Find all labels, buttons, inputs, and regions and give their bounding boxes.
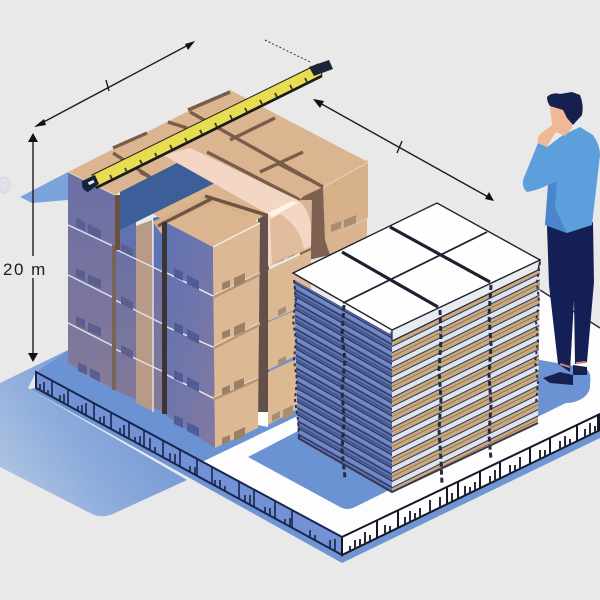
column B faces xyxy=(115,245,163,412)
hand at chin xyxy=(538,125,556,147)
column B tape strip xyxy=(136,220,153,411)
tape blade xyxy=(92,64,322,187)
platform white floor xyxy=(202,290,600,537)
floor edge line xyxy=(540,290,600,328)
column B white edge xyxy=(152,220,154,412)
column D bottom box xyxy=(268,352,311,425)
brown straps between columns xyxy=(158,196,266,226)
paper white rim xyxy=(392,260,540,341)
paper right face xyxy=(392,262,540,492)
tape measure xyxy=(82,60,333,192)
cast shadow band left of boxes xyxy=(20,172,68,203)
column D second box xyxy=(268,250,311,321)
column C highlights xyxy=(167,223,260,398)
left shoe xyxy=(543,372,573,385)
column A boxes xyxy=(68,172,115,390)
ankle skin xyxy=(560,362,586,367)
brown strap on right box xyxy=(300,186,330,262)
platform xyxy=(30,290,600,563)
tape tick marks xyxy=(110,78,307,179)
platform underside shadow xyxy=(30,388,600,563)
pale tape band across top xyxy=(163,148,311,266)
height arrow xyxy=(28,133,38,362)
paper bottom edge xyxy=(298,423,538,492)
right shoe xyxy=(573,365,587,375)
column D top box xyxy=(268,200,312,267)
front column C boxes xyxy=(162,202,260,448)
shadow under tape xyxy=(120,163,217,230)
column C right faces xyxy=(213,223,260,448)
column D dark strap xyxy=(258,212,269,412)
ruler strip: right side xyxy=(342,414,600,555)
head xyxy=(550,106,573,136)
white gap under column D xyxy=(256,408,268,427)
column B top box xyxy=(153,195,250,240)
column B upper blue xyxy=(119,218,136,262)
hair xyxy=(547,92,583,125)
column C left face xyxy=(165,223,215,448)
faint mark left xyxy=(0,177,10,193)
ruler strip: left side xyxy=(36,372,342,555)
column A row lines xyxy=(68,225,113,346)
paper stack xyxy=(293,203,540,492)
upper dark strap xyxy=(115,195,120,250)
paper seams xyxy=(342,285,491,485)
right box top highlight xyxy=(323,162,368,187)
height label: 20 m xyxy=(3,260,47,279)
floor shadow xyxy=(0,350,187,516)
person floor shadow xyxy=(542,369,590,403)
shirt shade xyxy=(545,181,567,233)
column D label marks xyxy=(272,249,295,422)
column B right blue xyxy=(153,215,163,272)
label marks on right box xyxy=(331,215,356,232)
column C label marks xyxy=(222,273,245,445)
tape highlight xyxy=(268,201,298,217)
box stacks xyxy=(68,90,368,448)
column C dark edge strap xyxy=(162,222,167,414)
paper left face xyxy=(294,280,392,492)
stack top surface xyxy=(68,90,368,247)
column C shadow seams xyxy=(213,273,260,401)
column D boxes xyxy=(256,200,312,427)
column D third box xyxy=(268,304,311,370)
hook highlight xyxy=(88,180,95,185)
right box lower row xyxy=(325,219,367,256)
width arrow xyxy=(34,41,195,127)
tape case xyxy=(309,60,333,76)
thin tile dividers xyxy=(343,232,487,303)
column B boxes xyxy=(112,195,166,412)
depth arrow xyxy=(313,99,494,201)
thick tile dividers xyxy=(342,227,490,307)
tape end hook xyxy=(82,175,99,192)
column B row lines xyxy=(115,249,166,373)
paper white top tiles xyxy=(293,203,540,330)
blue patch under paper xyxy=(248,300,590,509)
shirt xyxy=(523,127,600,233)
top surface front highlight xyxy=(68,172,115,195)
person xyxy=(523,92,600,403)
dotted guide line xyxy=(265,40,310,62)
right box top row xyxy=(323,160,368,238)
top straps xyxy=(113,92,323,200)
column B label marks xyxy=(121,243,133,359)
tape lower black edge xyxy=(96,76,322,188)
paper jagged edges xyxy=(293,262,540,438)
platform blue floor xyxy=(36,300,300,462)
gap strap between A and B xyxy=(112,245,116,390)
back right boxes xyxy=(300,160,368,262)
column C top face xyxy=(167,202,260,247)
column A label marks xyxy=(76,218,101,382)
pants xyxy=(547,222,594,372)
tape curved fold xyxy=(270,214,304,264)
top surface base xyxy=(68,90,368,247)
column A faces xyxy=(68,172,115,390)
